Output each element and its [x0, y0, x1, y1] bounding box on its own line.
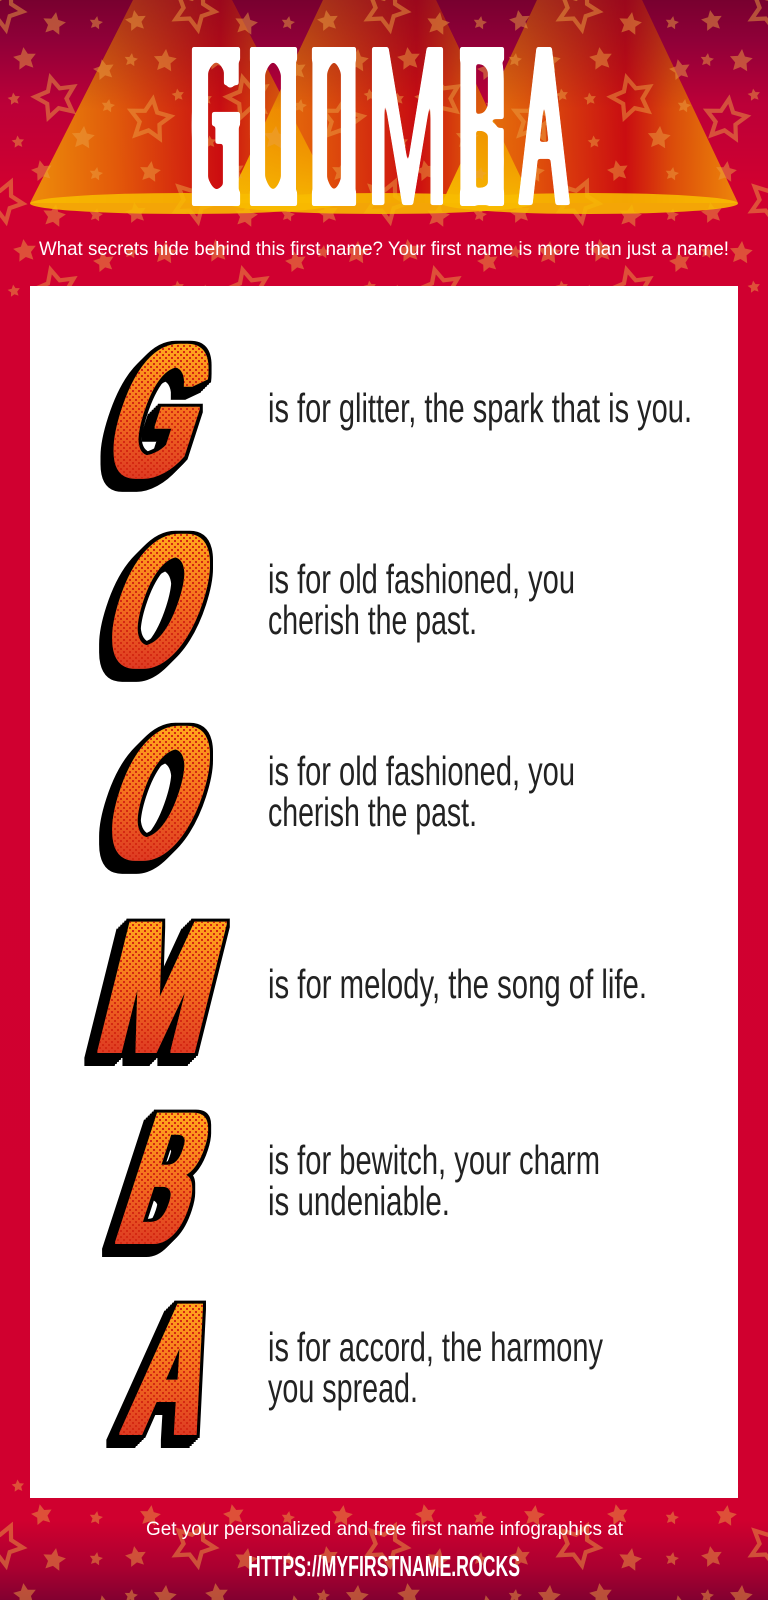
title: A [522, 0, 566, 254]
title [191, 0, 566, 255]
row: B [100, 1074, 600, 1284]
text: B meaning [268, 1137, 600, 1224]
text: A meaning [268, 1324, 603, 1411]
text: O meaning: cherish the past. [268, 789, 477, 835]
text: O meaning: is for old fashioned, you [268, 556, 575, 602]
text: O meaning [268, 556, 575, 643]
text: B meaning: is for bewitch, your charm [268, 1137, 600, 1183]
spotlight floor ellipses [30, 193, 738, 214]
spotlight cones [30, 0, 738, 203]
panel: letters [30, 286, 738, 1498]
comic letter M: M [83, 881, 242, 1092]
row: O second [85, 687, 575, 898]
text: A meaning: is for accord, the harmony [268, 1324, 603, 1370]
row: M [83, 881, 647, 1092]
footer url: HTTPS://MYFIRSTNAME.ROCKS [248, 1551, 520, 1583]
title: O [312, 0, 356, 254]
text: B meaning: is undeniable. [268, 1178, 450, 1224]
row: A [111, 1263, 603, 1474]
text: A meaning: you spread. [268, 1365, 418, 1411]
title: O [249, 0, 297, 254]
comic letter B: B [100, 1074, 232, 1284]
title: M [366, 0, 449, 254]
star pattern bottom [0, 1470, 768, 1600]
text: O meaning: is for old fashioned, you [268, 748, 575, 794]
footer text: Get your personalized and free first name infographics at [146, 1518, 624, 1540]
row: O [85, 495, 575, 706]
row: G [87, 307, 692, 517]
comic letter G: G [87, 307, 235, 517]
text: O meaning: cherish the past. [268, 597, 477, 643]
panel background [30, 286, 738, 1498]
title: G [191, 0, 241, 254]
star pattern top [0, 0, 768, 300]
comic letter O: O [85, 687, 238, 898]
comic letter A: A [111, 1263, 238, 1474]
comic letter O: O [85, 495, 238, 706]
title: B [456, 0, 506, 255]
text: O meaning [268, 748, 575, 835]
subtitle: What secrets hide behind this first name? Your first name is more than just a name! [39, 238, 729, 260]
